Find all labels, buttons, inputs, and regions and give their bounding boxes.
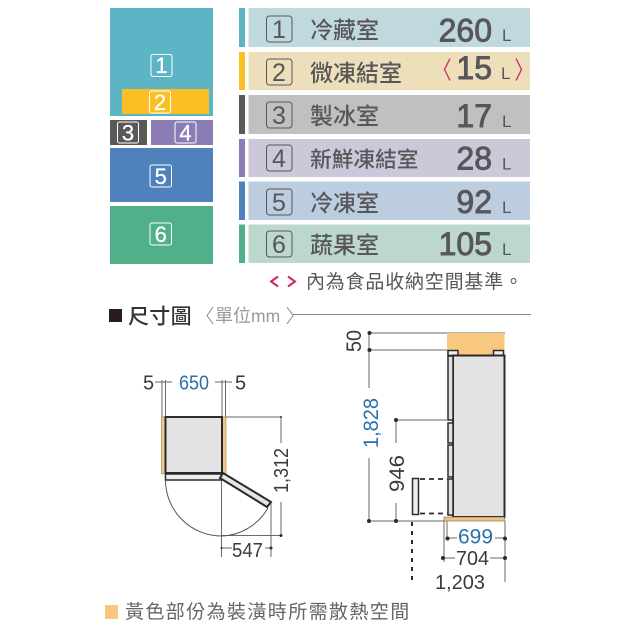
row 1 <box>239 8 530 48</box>
compartment 1: 1 <box>155 53 168 78</box>
body <box>453 356 504 517</box>
panel: compartment diagram <box>110 8 213 264</box>
door width label: 547 <box>232 540 263 562</box>
ventilation space <box>447 333 504 356</box>
extension lines <box>155 380 281 557</box>
compartment 3: 3 <box>122 120 134 146</box>
row 4: 4 <box>272 145 286 173</box>
label 704: 704 <box>456 548 489 570</box>
width labels: 650 <box>179 372 209 394</box>
compartment 6 <box>110 206 213 264</box>
row 4: L <box>502 154 511 174</box>
compartment 4 <box>151 120 213 146</box>
dimension lines <box>369 333 505 582</box>
dashed drawer rails <box>420 479 448 514</box>
row 3: 3 <box>272 102 286 130</box>
width labels <box>143 372 246 394</box>
row 3 <box>239 95 530 134</box>
doors <box>448 356 453 515</box>
compartment 2 <box>122 89 209 115</box>
row 1: 1 <box>272 16 286 44</box>
row 6: L <box>502 240 511 259</box>
capacity footnote: 內為食品收納空間基準。 <box>306 271 524 293</box>
row 2: 微凍結室 <box>310 60 402 86</box>
row 5: L <box>502 198 511 217</box>
diagram: top view <box>143 372 293 562</box>
width labels: 5 <box>143 372 154 394</box>
legend: ventilation note: 黃色部份為裝潢時所需散熱空間 <box>125 601 411 623</box>
row 2 <box>239 50 530 90</box>
row 6: 105 <box>439 226 492 262</box>
side clearance strips <box>162 417 226 474</box>
compartment 5: 5 <box>155 164 167 189</box>
label 1203: 1,203 <box>435 572 485 594</box>
row 2: L <box>501 64 510 83</box>
label 1828: 1,828 <box>360 398 383 448</box>
row 1: 260 <box>439 12 492 48</box>
panel: capacity table <box>239 8 530 263</box>
row 6 <box>239 224 530 263</box>
row 3: 17 <box>456 98 492 134</box>
left door <box>166 474 222 480</box>
label 50: 50 <box>343 330 366 352</box>
row 1: L <box>502 26 511 45</box>
diagram: side view <box>343 330 507 594</box>
row 3: 製冰室 <box>310 103 379 129</box>
width labels: 5 <box>235 372 246 394</box>
depth label: 1,312 <box>271 448 293 493</box>
label 946: 946 <box>386 455 409 492</box>
open drawer <box>412 478 418 514</box>
cabinet <box>166 417 222 473</box>
row 4: 28 <box>456 140 492 176</box>
row 5 <box>239 182 530 220</box>
row 4: 新鮮凍結室 <box>310 147 418 172</box>
row 2: 15 <box>456 50 492 86</box>
label 699: 699 <box>458 526 493 548</box>
heading: dimension diagram: 尺寸圖 <box>128 306 192 328</box>
dimension dots <box>220 416 282 550</box>
row 3: L <box>502 112 511 131</box>
compartment 6: 6 <box>155 222 167 247</box>
compartment 2: 2 <box>154 90 166 115</box>
dashed drawer travel <box>411 522 413 582</box>
row 4 <box>239 139 530 177</box>
heading: dimension diagram <box>109 306 531 328</box>
compartment 4: 4 <box>179 120 192 146</box>
dimension dots <box>367 331 507 560</box>
row 2: 2 <box>272 59 286 87</box>
row 6: 6 <box>272 231 286 259</box>
right door open <box>220 473 271 507</box>
compartment 1 <box>110 8 213 116</box>
heading: dimension diagram: 單位mm <box>215 306 280 326</box>
row 1: 冷藏室 <box>310 17 379 43</box>
compartment 5 <box>110 148 213 202</box>
base strip <box>444 517 504 521</box>
door swing arc <box>166 480 268 536</box>
hinges <box>448 350 504 356</box>
row 6: 蔬果室 <box>310 232 379 258</box>
row 5: 5 <box>272 189 286 217</box>
row 5: 冷凍室 <box>310 190 379 216</box>
compartment 3 <box>110 120 147 146</box>
row 5: 92 <box>456 184 492 220</box>
